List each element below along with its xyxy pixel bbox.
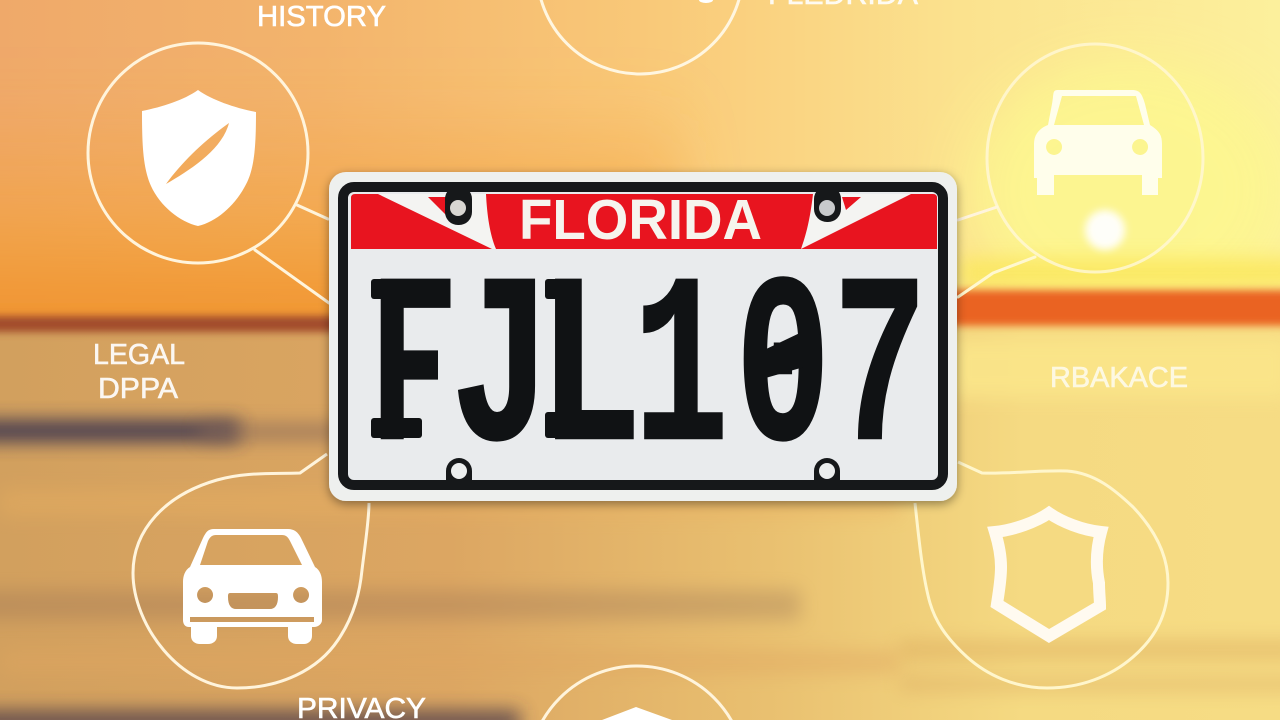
plate number: J	[451, 240, 551, 511]
plate number: L	[538, 238, 642, 510]
circle: shield icon, top left	[88, 43, 308, 263]
connector lines	[255, 205, 1035, 303]
state name: FLORIDA	[519, 188, 762, 252]
plate black border	[343, 187, 943, 485]
mounting holes	[445, 186, 841, 480]
circle: top centre, cropped	[537, 0, 743, 74]
plate number: F	[369, 238, 459, 510]
red header band	[351, 194, 937, 249]
plate number: 1	[633, 240, 729, 511]
circle: bottom centre, cropped	[528, 666, 746, 720]
circle: car icon, top right	[987, 44, 1203, 272]
icon: cropped shield	[602, 707, 672, 720]
label: right: RBAKACE	[1050, 362, 1188, 394]
circle: shield outline, bottom right	[915, 462, 1168, 688]
icon: shield with slash	[142, 90, 256, 226]
plate body	[329, 172, 957, 501]
icon: cropped fragment	[699, 0, 713, 3]
icon: car	[183, 529, 322, 644]
plate number: 7	[833, 238, 927, 510]
circle: car icon, bottom left	[133, 454, 369, 688]
label: legal dppa: DPPA	[98, 373, 179, 405]
license plate	[329, 172, 957, 511]
plate number	[369, 238, 927, 511]
label: legal dppa	[93, 339, 185, 405]
label: history: HISTORY	[257, 1, 386, 33]
label: legal dppa: LEGAL	[93, 339, 185, 371]
icon: car, washed out	[1034, 90, 1162, 195]
plate number: 0	[735, 240, 831, 511]
icon: shield outline	[995, 513, 1101, 636]
